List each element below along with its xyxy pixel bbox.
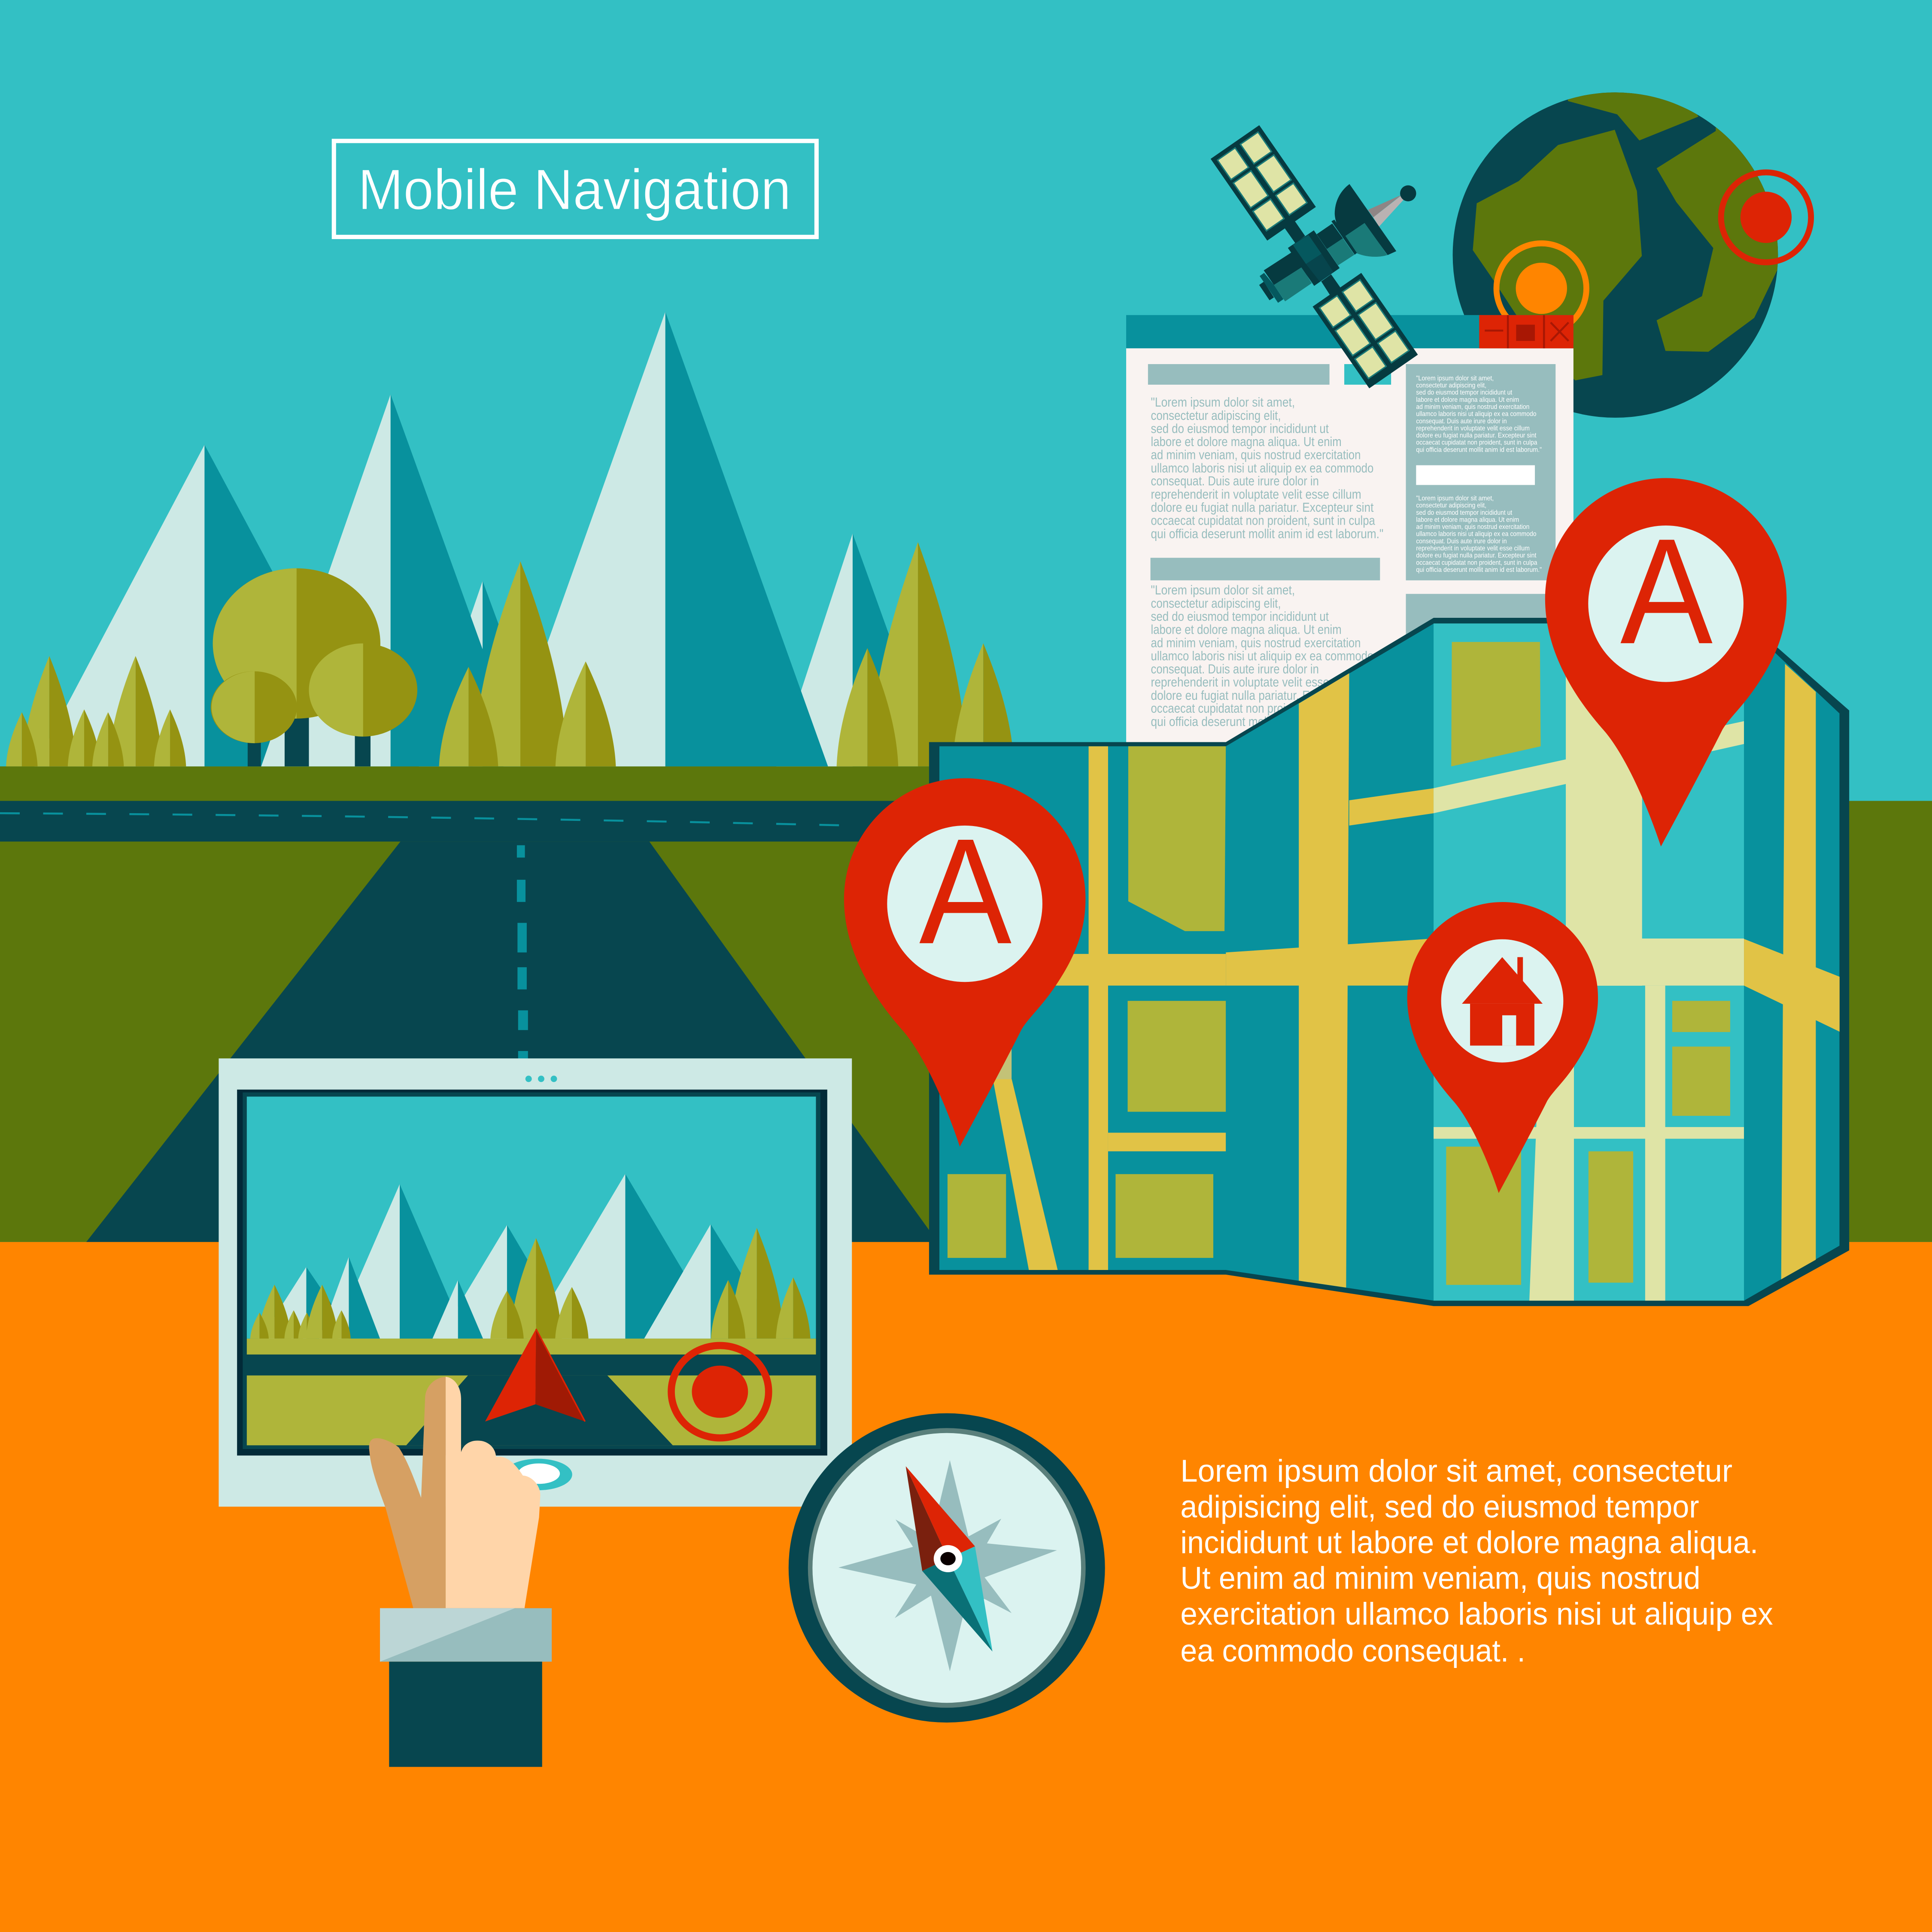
icon: map pin A, left: A: [919, 808, 1012, 975]
globe marker: orange: [1496, 243, 1586, 333]
panel: tablet: [219, 1058, 852, 1507]
icon: destination marker: [671, 1346, 769, 1438]
text block: first paragraph: labore et dolore magna aliqua. Ut enim: [1151, 435, 1342, 449]
sidebar: "Lorem ipsum dolor sit amet,: [1416, 494, 1494, 502]
shirt cuff: [380, 1608, 552, 1662]
map section 4: [1744, 623, 1840, 1300]
solar panel: top: [1211, 125, 1316, 240]
text block: body copy: incididunt ut labore et dolore magna aliqua.: [1180, 1525, 1758, 1560]
screen trees: [250, 1228, 811, 1339]
text block: second paragraph: ullamco laboris nisi ut aliquip ex ea commodo: [1151, 649, 1373, 663]
map section 2: [1226, 623, 1434, 1300]
orange foreground: [0, 1242, 1932, 1932]
sidebar: ad minim veniam, quis nostrud exercitation: [1416, 403, 1529, 411]
sidebar: "Lorem ipsum dolor sit amet,: [1416, 374, 1494, 382]
text block: body copy: ea commodo consequat. .: [1180, 1633, 1525, 1668]
tablet home button: [504, 1459, 572, 1490]
text block: body copy: Ut enim ad minim veniam, quis nostrud: [1180, 1561, 1700, 1596]
title: [334, 141, 817, 237]
sidebar: occaecat cupidatat non proident, sunt in culpa: [1416, 439, 1537, 447]
text block: first paragraph: sed do eiusmod tempor incididunt ut: [1151, 422, 1329, 436]
screen ground and road: [247, 1339, 816, 1445]
sidebar: qui officia deserunt mollit anim id est laborum.": [1416, 566, 1542, 574]
text block: second paragraph: [1151, 583, 1383, 729]
icon: map pin A, right: [1545, 478, 1786, 847]
map: [929, 618, 1849, 1306]
icon: compass: [789, 1413, 1105, 1722]
globe marker: red: [1721, 172, 1811, 262]
sidebar: ullamco laboris nisi ut aliquip ex ea commodo: [1416, 530, 1537, 538]
text block: body copy: [1180, 1453, 1773, 1668]
mountains: [34, 312, 936, 766]
hand light side: [446, 1377, 541, 1608]
sleeve: [389, 1662, 542, 1767]
text block: second paragraph: consectetur adipiscing elit,: [1151, 596, 1281, 611]
text block: first paragraph: qui officia deserunt mollit anim id est laborum.": [1151, 527, 1383, 541]
map section 1: [939, 746, 1227, 1270]
text block: second paragraph: occaecat cupidatat non proident, sunt in culpa: [1151, 702, 1375, 716]
globe: [1453, 74, 1811, 418]
trees: pointed left cluster: [6, 656, 186, 766]
sidebar: consequat. Duis aute irure dolor in: [1416, 537, 1507, 545]
text block: second paragraph: dolore eu fugiat nulla pariatur. Excepteur sint: [1151, 689, 1374, 703]
sidebar: ullamco laboris nisi ut aliquip ex ea commodo: [1416, 410, 1537, 418]
sidebar: dolore eu fugiat nulla pariatur. Excepteur sint: [1416, 431, 1537, 439]
icon: map pin home: [1407, 902, 1598, 1193]
sidebar: labore et dolore magna aliqua. Ut enim: [1416, 396, 1519, 404]
satellite body and dish: [1259, 184, 1416, 303]
sidebar: reprehenderit in voluptate velit esse cillum: [1416, 424, 1530, 432]
sidebar: [1406, 364, 1555, 668]
text block: first paragraph: ad minim veniam, quis nostrud exercitation: [1151, 448, 1361, 462]
window controls: [1479, 315, 1574, 348]
text block: first paragraph: consequat. Duis aute irure dolor in: [1151, 474, 1319, 489]
sidebar: occaecat cupidatat non proident, sunt in culpa: [1416, 559, 1537, 566]
road: [0, 801, 949, 1242]
sidebar: consectetur adipiscing elit,: [1416, 382, 1486, 389]
sidebar: consectetur adipiscing elit,: [1416, 501, 1486, 509]
text block: second paragraph: sed do eiusmod tempor incididunt ut: [1151, 610, 1329, 624]
text block: first paragraph: consectetur adipiscing elit,: [1151, 409, 1281, 423]
text block: first paragraph: ullamco laboris nisi ut aliquip ex ea commodo: [1151, 461, 1373, 475]
panel: browser window: [1126, 315, 1574, 749]
trees: round: [211, 568, 417, 766]
sidebar: ad minim veniam, quis nostrud exercitation: [1416, 523, 1529, 531]
trees: pointed centre and right clusters: [439, 542, 1014, 766]
icon: map pin A, right: A: [1620, 507, 1713, 675]
sidebar: qui officia deserunt mollit anim id est laborum.": [1416, 446, 1542, 453]
sidebar: sed do eiusmod tempor incididunt ut: [1416, 389, 1513, 396]
text block: second paragraph: labore et dolore magna aliqua. Ut enim: [1151, 623, 1342, 637]
compass star: [838, 1460, 1057, 1671]
text block: second paragraph: ad minim veniam, quis nostrud exercitation: [1151, 636, 1361, 650]
map section 3: [1434, 623, 1744, 1300]
sidebar: consequat. Duis aute irure dolor in: [1416, 417, 1507, 425]
icon: navigation arrow: [485, 1329, 585, 1422]
tablet screen: [247, 1097, 816, 1445]
screen mountains: [261, 1174, 781, 1339]
sidebar: reprehenderit in voluptate velit esse cillum: [1416, 544, 1530, 552]
icon: hand: [369, 1377, 552, 1767]
title: Mobile Navigation: [358, 158, 791, 222]
panel: landscape ground: [0, 766, 1932, 1242]
text block: first paragraph: "Lorem ipsum dolor sit amet,: [1151, 395, 1295, 410]
text block: body copy: Lorem ipsum dolor sit amet, consectetur: [1180, 1453, 1732, 1488]
sidebar: dolore eu fugiat nulla pariatur. Excepteur sint: [1416, 552, 1537, 559]
text block: second paragraph: reprehenderit in voluptate velit esse cillum: [1151, 675, 1361, 690]
icon: satellite: [1211, 125, 1418, 389]
text block: second paragraph: consequat. Duis aute irure dolor in: [1151, 662, 1319, 676]
sidebar: sed do eiusmod tempor incididunt ut: [1416, 509, 1513, 516]
text block: body copy: adipisicing elit, sed do eiusmod tempor: [1180, 1489, 1699, 1524]
text block: first paragraph: dolore eu fugiat nulla pariatur. Excepteur sint: [1151, 501, 1374, 515]
text block: first paragraph: [1151, 395, 1383, 541]
text block: body copy: exercitation ullamco laboris nisi ut aliquip ex: [1180, 1596, 1773, 1631]
text block: first paragraph: occaecat cupidatat non proident, sunt in culpa: [1151, 514, 1375, 528]
text block: second paragraph: "Lorem ipsum dolor sit amet,: [1151, 583, 1295, 598]
icon: map pin A, left: [844, 778, 1085, 1147]
hand shadow side: [369, 1377, 446, 1608]
icon: house: [1462, 957, 1543, 1045]
text block: first paragraph: reprehenderit in voluptate velit esse cillum: [1151, 487, 1361, 501]
tablet camera dots: [526, 1075, 557, 1082]
solar panel: bottom: [1312, 273, 1418, 389]
sidebar: labore et dolore magna aliqua. Ut enim: [1416, 516, 1519, 523]
text block: second paragraph: qui officia deserunt mollit anim id est laborum.": [1151, 715, 1383, 729]
compass needle: [906, 1466, 993, 1652]
